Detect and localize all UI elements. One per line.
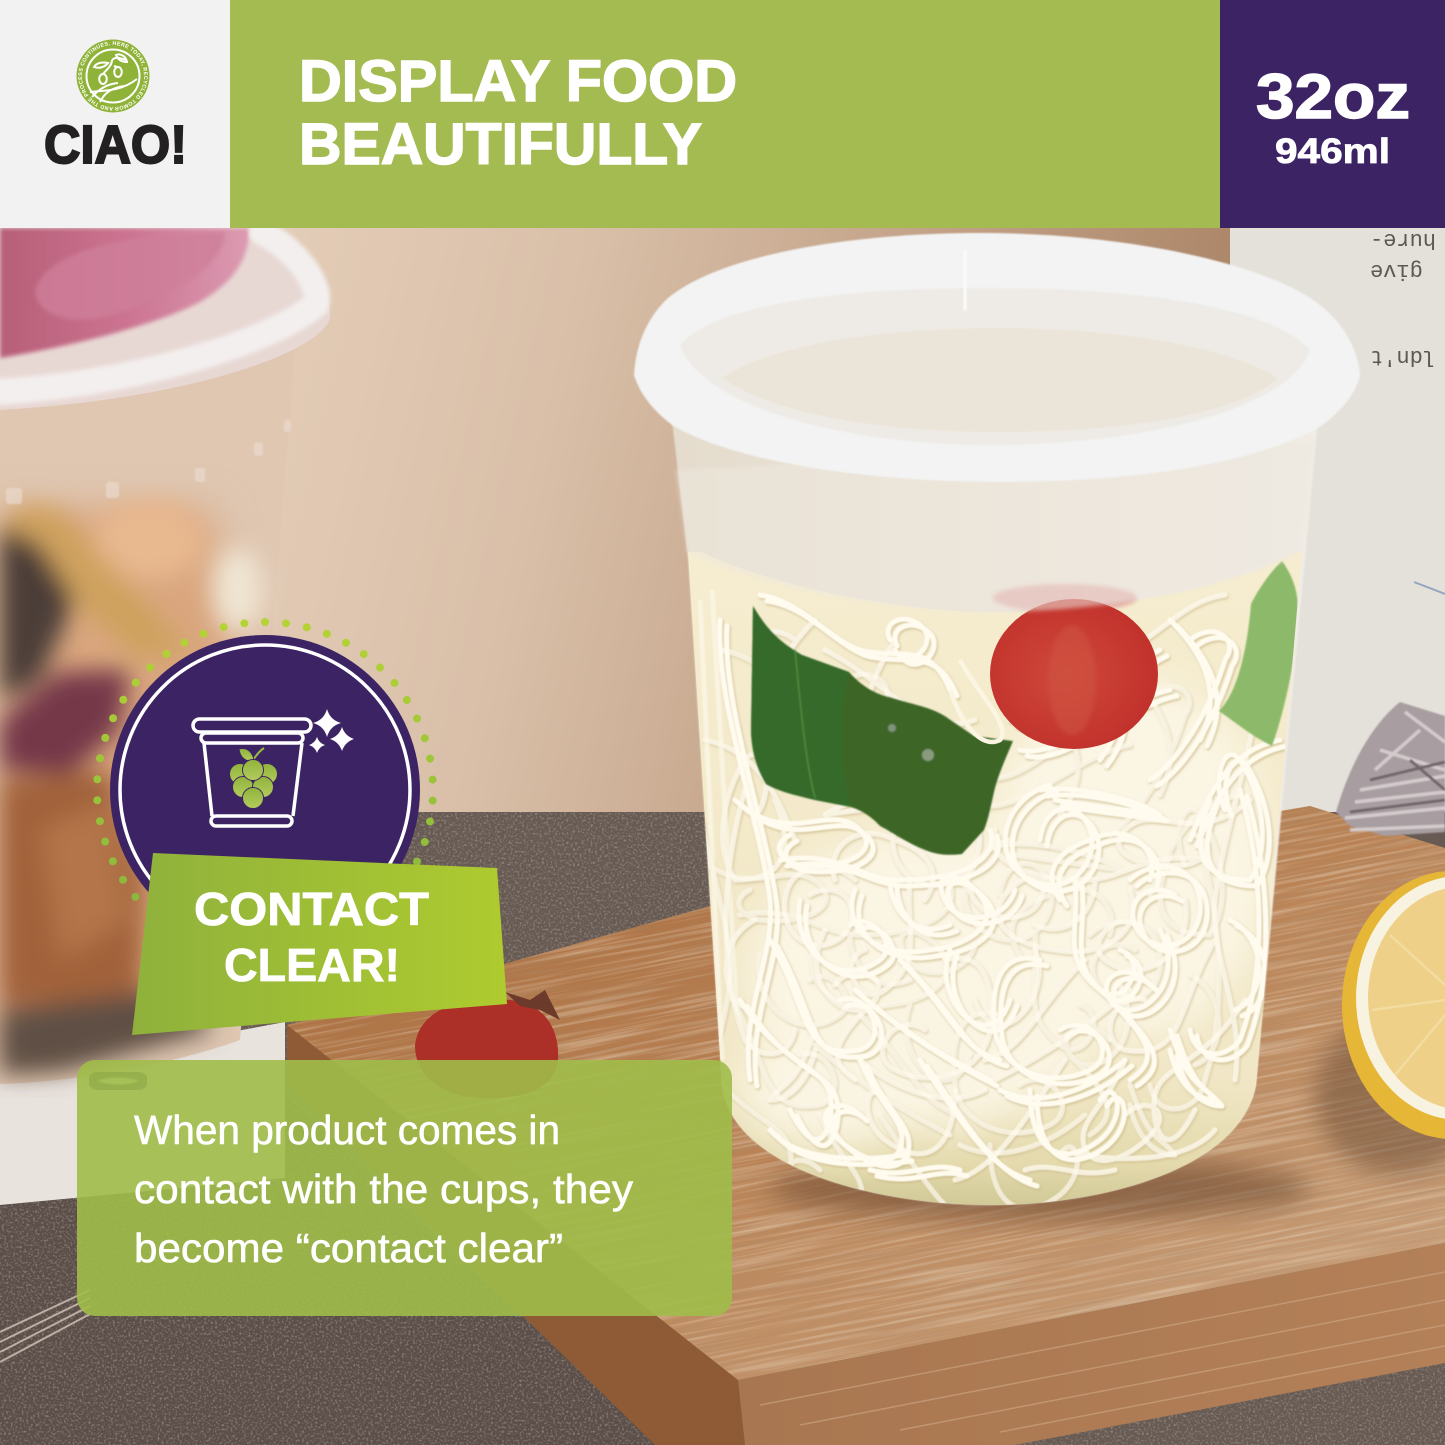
icon: grapes: [230, 748, 278, 808]
noodle loop over leaf: [950, 660, 1002, 742]
description text: become “contact clear”: [134, 1225, 563, 1271]
description text: [134, 1107, 634, 1271]
title: [299, 49, 737, 177]
description text: contact with the cups, they: [134, 1166, 634, 1212]
logo wordmark: CIAO!: [44, 115, 187, 175]
dotted ring: [97, 622, 433, 958]
left lid: [0, 228, 330, 410]
paper card: [1230, 227, 1445, 818]
logo badge: [76, 40, 150, 112]
napkin: [0, 1022, 285, 1205]
noodles: [680, 595, 1287, 1235]
size panel: 32oz: [1256, 62, 1410, 132]
size panel: [1220, 0, 1445, 228]
paper card: give: [1370, 258, 1423, 283]
container lid: [634, 233, 1360, 482]
description panel: [77, 1060, 732, 1316]
twine: [1336, 702, 1445, 836]
broth and noodles: [680, 545, 1302, 1235]
right basil leaf: [1219, 561, 1298, 746]
cherry tomato: [990, 584, 1158, 749]
header: [0, 0, 1445, 228]
counter: [0, 812, 1445, 1445]
cutting board top: [287, 806, 1445, 1380]
icon: sparkles: [309, 709, 354, 753]
title band: [230, 0, 1220, 228]
left container body: [0, 812, 242, 1084]
basil leaf: [751, 606, 1013, 855]
main deli container: [634, 233, 1360, 1235]
label ribbon: [132, 853, 507, 1035]
frosted band above broth: [676, 440, 1316, 612]
paper card: ldn't: [1370, 344, 1436, 369]
noodle mass: [740, 680, 1270, 1150]
cutting board left face: [287, 1025, 745, 1445]
title: BEAUTIFULLY: [299, 112, 702, 177]
container ticks: [6, 420, 291, 504]
title: DISPLAY FOOD: [299, 49, 737, 114]
badge: contact clear: [97, 622, 507, 1035]
size panel: 946ml: [1275, 132, 1390, 171]
left container: [0, 228, 330, 1084]
lemon: [1315, 871, 1445, 1175]
label ribbon: CONTACT: [194, 883, 429, 935]
fork: [0, 1290, 90, 1362]
container body: [672, 420, 1318, 1205]
description text: When product comes in: [134, 1107, 560, 1153]
left edge strands: [700, 590, 736, 1060]
cutting board front face: [738, 1243, 1445, 1445]
paper card: hure-: [1370, 227, 1436, 252]
label ribbon: CLEAR!: [224, 939, 400, 991]
logo panel: [0, 0, 230, 228]
wall: [0, 228, 1240, 828]
ring mark seen through panel: [92, 1073, 144, 1089]
tomato on board: [415, 990, 560, 1098]
purple circle: [110, 635, 420, 945]
left container contents: [0, 500, 263, 1075]
icon: cup with grapes: [193, 709, 354, 826]
board shadow from cup: [770, 1156, 1310, 1220]
